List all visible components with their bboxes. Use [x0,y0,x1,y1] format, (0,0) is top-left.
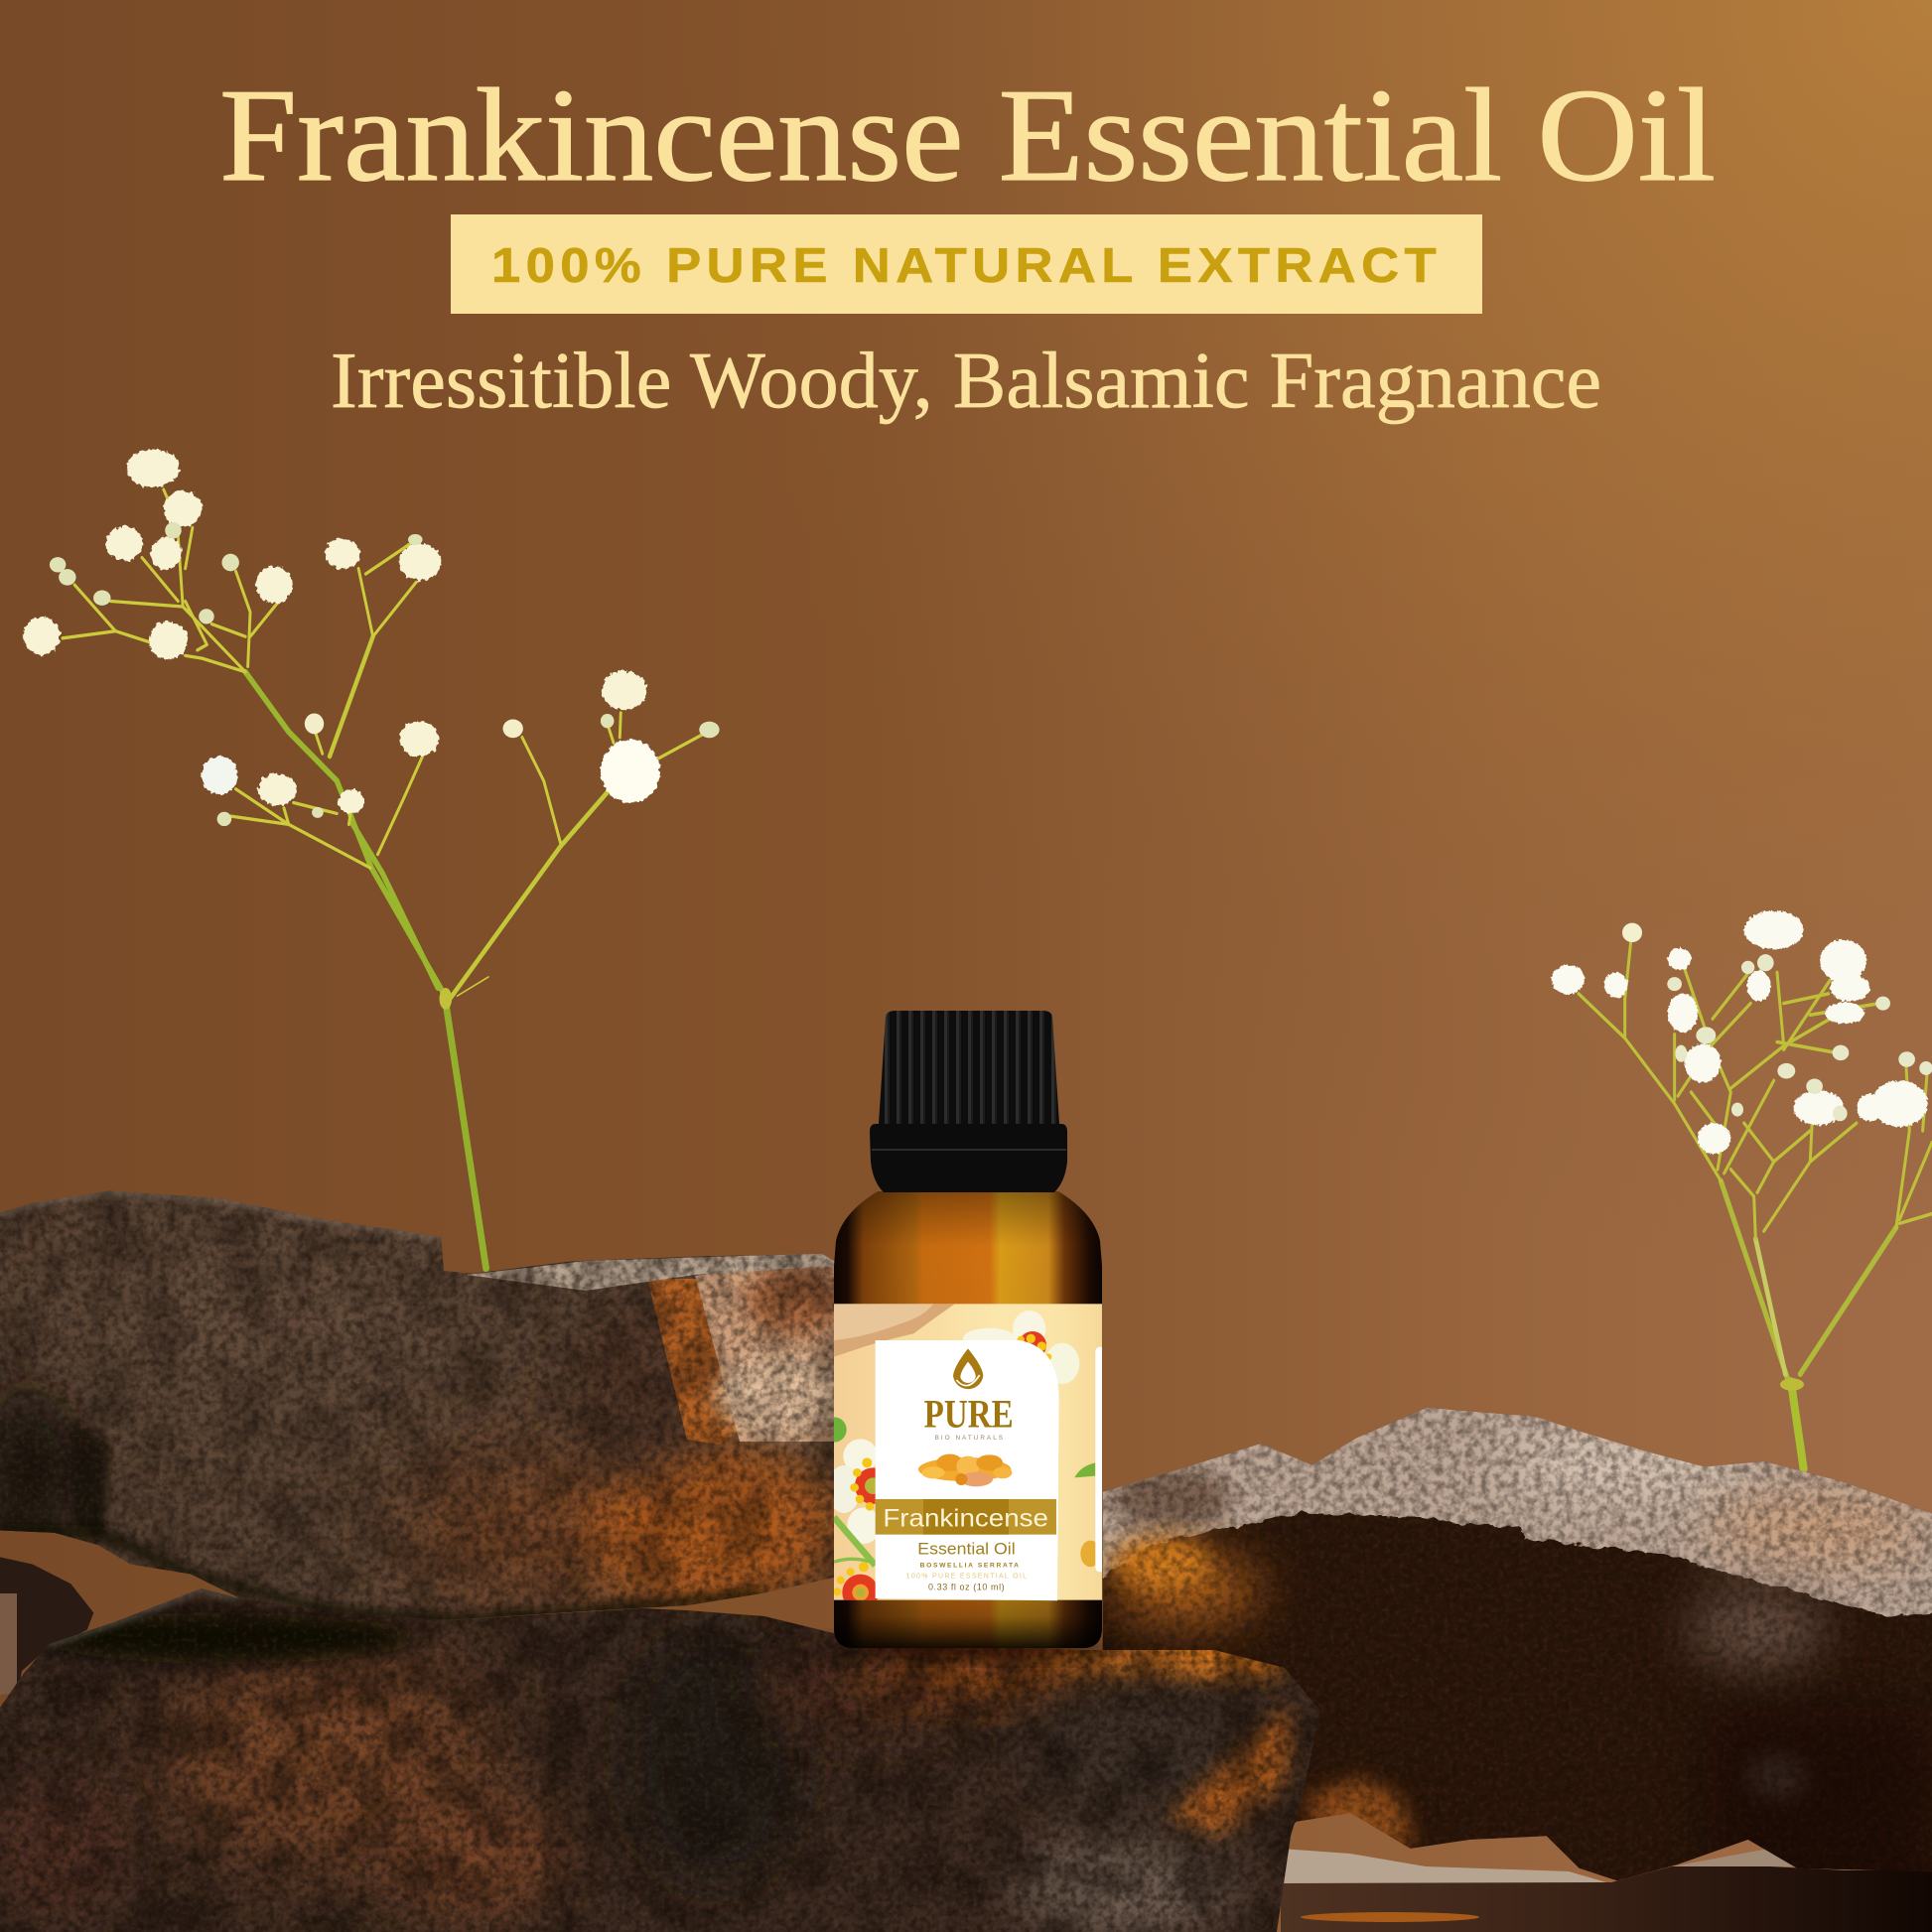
logo tagline: BIO NATURALS [935,1435,1003,1442]
subtitle: Irressitible Woody, Balsamic Fragnance [331,336,1601,425]
botanical name: BOSWELLIA SERRATA [920,1563,1019,1570]
right flower sprig [1552,910,1932,1468]
small rock far left [0,1557,93,1696]
product name bar: Frankincense [883,1504,1048,1532]
volume: 0.33 fl oz (10 ml) [928,1583,1005,1592]
label text: Essential Oil [917,1539,1016,1558]
bottom-right ground [1281,1849,1932,1932]
glass body [834,1191,1102,1648]
right rock [1102,1408,1932,1880]
title: Frankincense Essential Oil [219,62,1716,208]
bottle [819,1011,1117,1658]
upper left rock [0,1181,854,1638]
logo wordmark: PURE [924,1391,1014,1436]
label [821,1304,1105,1610]
left flower sprig [23,449,720,1268]
banner: 100% PURE NATURAL EXTRACT [491,239,1442,293]
bottle shadow [819,1638,1117,1658]
product name bar [876,1499,1056,1535]
purity line: 100% PURE ESSENTIAL OIL [906,1573,1027,1580]
banner [451,214,1482,314]
frankincense resin [918,1454,1012,1486]
logo drop [953,1348,983,1389]
bottle cap [870,1011,1067,1192]
white panel [876,1340,1059,1600]
lower front rock [0,1579,1330,1932]
label artwork [821,1304,1105,1610]
